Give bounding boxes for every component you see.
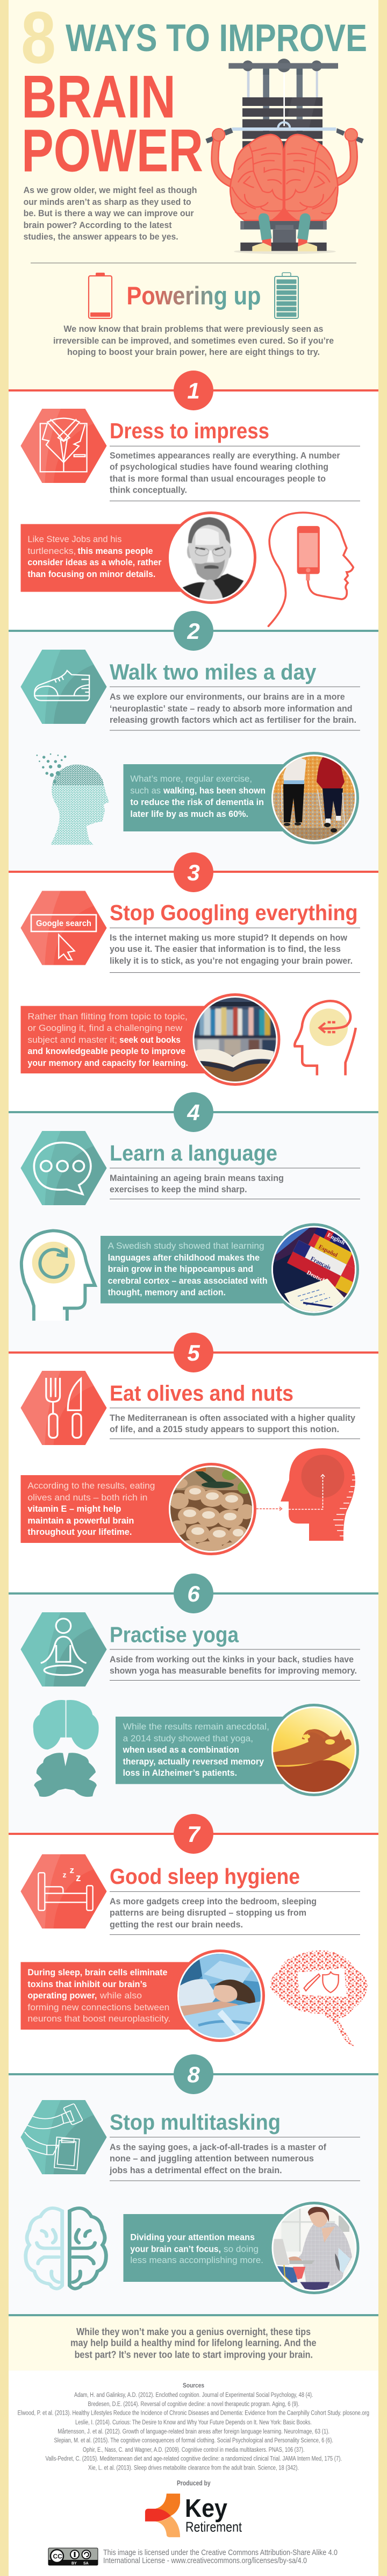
callout box (20, 1962, 220, 2030)
badge: number 2: 2 (187, 618, 200, 644)
badge: number 3: 3 (187, 860, 200, 885)
body text: Is the internet making us more stupid? It depends on how (110, 933, 348, 943)
callout box (20, 524, 212, 592)
logo: Key Retirement: Retirement (185, 2518, 242, 2535)
icon: bed hexagon: z (76, 1873, 81, 1884)
callout box: than focusing on minor details. (27, 569, 155, 579)
callout box: Dividing your attention means (130, 2232, 255, 2243)
licence text (103, 2549, 338, 2565)
licence text: This image is licensed under the Creative Commons Attribution-Share Alike 4.0 (103, 2549, 338, 2557)
icon: multitasking hexagon (20, 2100, 106, 2174)
badge: number 2 (174, 611, 213, 651)
callout box: seek out books (119, 1035, 181, 1045)
body text: likely it is to stick, as you’re not engaging your brain power. (110, 956, 353, 966)
title: brain: BRAIN (22, 63, 176, 131)
callout box: toxins that inhibit our brain’s (27, 1979, 147, 1989)
icon: empty battery (89, 273, 112, 318)
icon: bed hexagon (20, 1854, 106, 1929)
callout box: vitamin E – might help (27, 1504, 121, 1514)
callout box (124, 764, 314, 831)
badge: number 8: 8 (187, 2062, 200, 2087)
sources list: Leslie, I. (2014). Curious: The Desire to Know and Why Your Future Depends on It. New York: Basic Books. (75, 2420, 312, 2426)
illustration: head with smartphone (268, 513, 353, 626)
callout box: walking, has been shown (163, 785, 266, 795)
callout box: less means accomplishing more. (130, 2255, 263, 2265)
body text: that is more formal than usual encourages people to (110, 473, 326, 484)
body text: As the saying goes, a jack-of-all-trades is a master of (110, 2142, 326, 2152)
icon: google search hexagon (20, 891, 106, 965)
body text (110, 1413, 356, 1434)
icon: google search hexagon: Google search (36, 919, 91, 928)
callout box: later life by as much as 60%. (130, 809, 248, 819)
panel: section 7 good sleep hygiene (9, 1814, 378, 2046)
photo: woman multitasking (269, 2203, 358, 2295)
body text: think conceptually. (110, 485, 187, 495)
callout box: What’s more, regular exercise, (130, 774, 252, 784)
illustration: head with refresh arrow (22, 1230, 95, 1321)
callout box: when used as a combination (123, 1745, 239, 1755)
badge: number 6 (174, 1574, 213, 1613)
illustration: head with memory arrow (295, 1001, 356, 1076)
panel: section 1 dress to impress (9, 371, 378, 626)
body text: The Mediterranean is often associated with a higher quality (110, 1413, 356, 1423)
body text: exercises to keep the mind sharp. (110, 1184, 247, 1194)
callout box: Like Steve Jobs and his (27, 534, 121, 544)
illustration: brain scans (33, 1700, 99, 1797)
callout box: operating power, (27, 1990, 97, 2001)
sources list: Ophir, E., Nass, C. and Wagner, A.D. (2009). Cognitive control in media multitaskers. PNAS, 106 (37). (83, 2447, 304, 2453)
photo: language books and laptop: Français (310, 1255, 332, 1271)
body text: As more gadgets creep into the bedroom, sleeping (110, 1896, 317, 1906)
illustration: dissolving dotted head (36, 753, 109, 845)
callout box: brain grow in the hippocampus and (108, 1264, 253, 1274)
illustration: two brain halves (26, 2208, 106, 2289)
callout box: a 2014 study showed that yoga, (123, 1733, 253, 1744)
icon: creative commons badge: SA (83, 2562, 89, 2565)
body text (110, 933, 353, 966)
intro text: As we grow older, we might feel as though (24, 185, 197, 195)
icon: meditating figure hexagon (20, 1612, 106, 1687)
callout box: thought, memory and action. (108, 1287, 226, 1297)
callout box: According to the results, eating (27, 1481, 155, 1491)
heading: Eat olives and nuts (110, 1380, 293, 1405)
body text (110, 1173, 284, 1194)
sources list: Adam, H. and Galinksy, A.D. (2012). Enclothed cognition. Journal of Experimental Social Psychology, 48 (4). (74, 2392, 313, 2399)
callout box: subject and master it; (27, 1035, 117, 1045)
body text (110, 692, 356, 725)
heading: Dress to impress (110, 418, 269, 443)
callout box (124, 2214, 314, 2282)
panel: section 4 learn a language (9, 1092, 378, 1321)
heading: Walk two miles a day (110, 659, 317, 684)
callout box: While the results remain anecdotal, (123, 1721, 269, 1732)
body text (109, 2142, 326, 2175)
photo: language books and laptop: English (326, 1232, 346, 1246)
callout box: therapy, actually reversed memory (123, 1756, 264, 1767)
body text: releasing growth factors which act as fertiliser for the brain. (110, 715, 356, 725)
logo: Key Retirement (145, 2494, 242, 2537)
icon: full battery (275, 273, 298, 318)
sources list: Sources (183, 2382, 204, 2389)
sources list: Xie, L. et al. (2013). Sleep drives metabolite clearance from the adult brain. Science, 18 (342). (88, 2465, 299, 2472)
powering up text (53, 324, 334, 357)
sources list: Slepian, M. et al. (2015). The cognitive consequences of formal clothing. Social Psychological and Personality Science, 6 (6). (54, 2438, 333, 2444)
photo: open book and bookshelf (191, 995, 279, 1084)
callout box (101, 1236, 314, 1304)
panel: closing statement (9, 2314, 378, 2360)
intro text: brain power? According to the latest (24, 220, 172, 230)
panel: section 5 eat olives and nuts (9, 1333, 378, 1554)
callout box: your memory and capacity for learning. (27, 1058, 188, 1068)
badge: number 7 (174, 1814, 213, 1854)
intro text (24, 185, 197, 242)
panel: section 8 stop multitasking (9, 2054, 378, 2295)
icon: bed hexagon: z (62, 1870, 67, 1879)
callout box: and knowledgeable people to improve (27, 1046, 185, 1056)
callout box: such as (130, 785, 161, 795)
callout box: forming new connections between (27, 2002, 169, 2012)
panel: closing statement: best part? It’s never too late to start improving your brain. (75, 2350, 313, 2360)
callout box: neurons that boost neuroplasticity. (27, 2013, 170, 2024)
body text: Maintaining an ageing brain means taxing (110, 1173, 284, 1183)
heading: Learn a language (110, 1141, 277, 1165)
licence text: International License - www.creativecommons.org/licenses/by-sa/4.0 (103, 2557, 307, 2565)
callout box: so doing (224, 2244, 259, 2254)
body text (110, 1654, 357, 1676)
badge: number 7: 7 (187, 1821, 200, 1847)
photo: couple walking (270, 753, 358, 843)
body text: As we explore our environments, our brains are in a more (110, 692, 345, 702)
callout box (20, 1475, 212, 1543)
header (21, 0, 367, 357)
produced by: Produced by (177, 2480, 211, 2487)
title: power: POWER (22, 117, 203, 184)
icon: shoe hexagon (20, 650, 106, 724)
icon: creative commons badge: CC (53, 2552, 62, 2560)
callout box: this means people (77, 546, 153, 556)
body text: Sometimes appearances really are everything. A number (110, 451, 340, 461)
body text: getting the rest our brain needs. (110, 1919, 243, 1930)
panel: closing statement: While they won’t make you a genius overnight, these tips (76, 2326, 311, 2337)
callout box: throughout your lifetime. (27, 1527, 132, 1537)
sources list: Mårtensson, J. et al. (2012). Growth of language-related brain areas after foreign language learning. NeuroImage, 63 (1). (58, 2429, 329, 2435)
icon: fork and knife hexagon (20, 1371, 106, 1445)
callout box: to reduce the risk of dementia in (130, 797, 264, 807)
photo: olives and nuts (168, 1464, 255, 1554)
logo: Key Retirement: Key (185, 2494, 227, 2522)
callout box: olives and nuts – both rich in (27, 1492, 147, 1503)
heading: powering up: Powering up (127, 281, 261, 310)
panel: closing statement: may help build a healthy mind for lifelong learning. And the (70, 2338, 316, 2349)
callout box: Rather than flitting from topic to topic, (27, 1011, 188, 1022)
body text: shown yoga has measurable benefits for improving memory. (110, 1666, 357, 1676)
intro text: be. But is there a way we can improve our (24, 208, 194, 218)
badge: number 6: 6 (187, 1581, 200, 1606)
body text: ‘neuroplastic’ state – ready to absorb more information and (110, 703, 353, 714)
callout box: your brain can’t focus, (130, 2244, 221, 2254)
powering up text: We now know that brain problems that were previously seen as (63, 324, 323, 334)
panel: section 2 walk two miles a day (9, 611, 378, 845)
body text: of psychological studies have found wearing clothing (110, 462, 328, 472)
badge: number 4 (174, 1092, 213, 1132)
heading: Practise yoga (110, 1622, 239, 1647)
photo: meditating hand at sunset (270, 1705, 358, 1796)
illustration: dotted brain with sword and shield (270, 1951, 368, 2046)
heading: Stop Googling everything (110, 900, 358, 925)
intro text: studies, the answer appears to be yes. (24, 231, 178, 242)
body text (110, 1896, 317, 1930)
icon: creative commons badge (48, 2548, 98, 2565)
powering up text: hoping to boost your brain power, here are eight things to try. (67, 347, 320, 357)
callout box: languages after childhood makes the (108, 1253, 260, 1263)
callout box: A Swedish study showed that learning (108, 1241, 264, 1251)
powering up text: irreversible can be improved, and sometimes even cured. So if you’re (53, 336, 334, 346)
callout box: or Googling it, find a challenging new (27, 1023, 183, 1033)
callout box: while also (99, 1990, 142, 2001)
callout box: loss in Alzheimer’s patients. (123, 1768, 237, 1778)
body text: of life, and a 2015 study appears to support this notion. (110, 1424, 339, 1434)
photo: language books and laptop (271, 1223, 359, 1315)
body text: jobs has a detrimental effect on the brain. (109, 2165, 282, 2175)
body text: you use it. The easier that information is to find, the less (110, 944, 341, 954)
illustration: brain on a lat pulldown machine (205, 59, 364, 254)
icon: shirt hexagon (20, 409, 106, 483)
badge: number 3 (174, 852, 213, 892)
callout box: During sleep, brain cells eliminate (27, 1967, 167, 1977)
icon: speech bubble hexagon (20, 1131, 106, 1205)
illustration: solid head with arrows (256, 1448, 355, 1541)
body text: patterns are being disrupted – stopping us from (110, 1908, 306, 1918)
photo: language books and laptop: Español (318, 1243, 339, 1258)
panel: section 3 stop googling everything (9, 852, 378, 1084)
callout box (116, 1717, 314, 1784)
badge: number 8 (174, 2054, 213, 2094)
badge: number 1: 1 (187, 378, 200, 403)
callout box (20, 1006, 235, 1073)
photo: language books and laptop: Deutsch (306, 1269, 327, 1284)
body text: none – and juggling attention between numerous (110, 2153, 314, 2164)
badge: number 5: 5 (187, 1340, 200, 1365)
icon: creative commons badge: BY (71, 2562, 77, 2565)
badge: number 5 (174, 1333, 213, 1372)
body text (110, 451, 340, 495)
panel: section 6 practise yoga (9, 1574, 378, 1797)
sources list (18, 2382, 369, 2472)
callout box: turtlenecks, (27, 546, 76, 556)
sources list: Bredesen, D.E. (2014). Reversal of cognitive decline: a novel therapeutic program. Aging, 6 (9). (88, 2401, 299, 2408)
photo: woman sleeping (176, 1951, 263, 2040)
badge: number 4: 4 (187, 1100, 200, 1125)
callout box: cerebral cortex – areas associated with (108, 1276, 268, 1286)
icon: bed hexagon: z (70, 1865, 74, 1875)
heading: Good sleep hygiene (110, 1864, 300, 1889)
body text: Aside from working out the kinks in your back, studies have (110, 1654, 354, 1664)
heading: Stop multitasking (110, 2110, 281, 2134)
intro text: our minds aren’t as sharp as they used to (24, 197, 191, 207)
callout box: consider ideas as a whole, rather (27, 557, 162, 567)
photo: Steve Jobs portrait (168, 513, 255, 602)
badge: number 1 (174, 371, 213, 410)
callout box: maintain a powerful brain (27, 1515, 134, 1526)
